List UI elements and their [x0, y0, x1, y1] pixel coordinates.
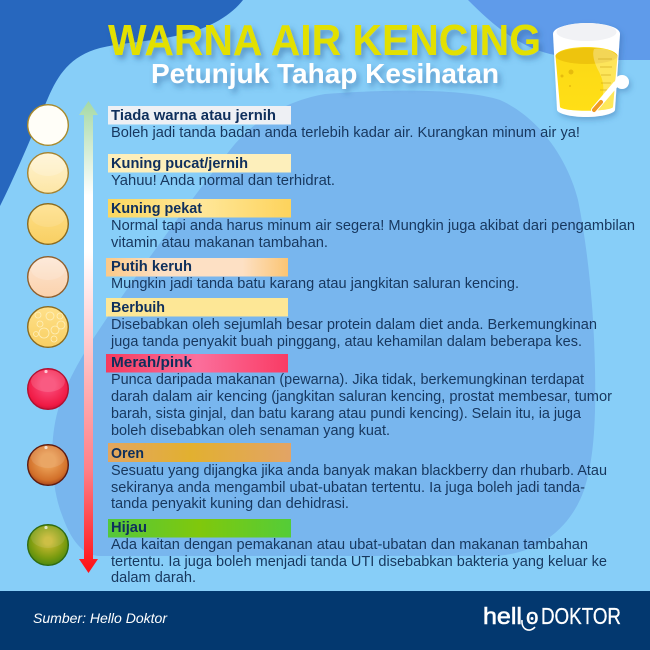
panel: green: Ada kaitan dengan pemakanan atau ubat-ubatan dan makanan tambahan — [111, 537, 588, 553]
panel: green — [108, 519, 607, 586]
title: WARNA AIR KENCING — [108, 16, 541, 65]
icon: foamy sample — [28, 307, 68, 347]
panel: dark yellow: Kuning pekat — [111, 200, 202, 217]
panel: green: tertentu. Ia juga boleh menjadi tanda UTI disebabkan bakteria yang keluar ke — [111, 554, 607, 570]
icon: orange sample — [28, 445, 68, 485]
panel: orange: tanda penyakit kuning dan dehidrasi. — [111, 496, 349, 512]
icon: pale yellow sample — [28, 153, 68, 193]
panel: foamy — [106, 298, 597, 350]
panel: orange: Oren — [111, 445, 144, 462]
panel: orange — [108, 443, 607, 512]
arrow: hydration scale — [79, 101, 98, 573]
panel: pale yellow: Yahuu! Anda normal dan terhidrat. — [111, 173, 335, 189]
panel: cloudy white: Putih keruh — [111, 258, 192, 275]
icon: urine cup with dipstick — [553, 23, 629, 117]
panel: cloudy white: Mungkin jadi tanda batu karang atau jangkitan saluran kencing. — [111, 276, 519, 292]
panel: orange: Sesuatu yang dijangka jika anda banyak makan blackberry dan rhubarb. Atau — [111, 463, 607, 479]
panel: clear: Tiada warna atau jernih — [111, 107, 276, 124]
icon: red sample — [28, 369, 68, 409]
panel: green: dalam darah. — [111, 570, 196, 586]
panel: red or pink: Merah/pink — [111, 354, 193, 371]
panel: red or pink: darah dalam air kencing (jangkitan saluran kencing, prostat membesar, tumor — [111, 389, 612, 405]
logo: hell — [483, 603, 522, 629]
title — [108, 16, 541, 89]
subtitle: Petunjuk Tahap Kesihatan — [151, 58, 499, 89]
panel: red or pink: Punca daripada makanan (pewarna). Jika tidak, berkemungkinan terdapat — [111, 372, 584, 388]
panel: dark yellow — [108, 199, 635, 251]
panel: orange: sekiranya anda mengambil ubat-ubatan tertentu. Ia juga boleh jadi tanda- — [111, 480, 585, 496]
icon: dark yellow sample — [28, 204, 68, 244]
panel: foamy: Berbuih — [111, 299, 165, 316]
panel: red or pink: barah, sista ginjal, dan batu karang atau pundi kencing). Selain itu, ia juga — [111, 406, 582, 422]
panel: red or pink: boleh disebabkan oleh senaman yang kuat. — [111, 423, 390, 439]
panel: clear — [108, 106, 580, 141]
icon: cloudy white sample — [28, 257, 68, 297]
icon: green sample — [28, 525, 68, 565]
panel: foamy: juga tanda penyakit buah pinggang, atau kehamilan dalam beberapa kes. — [110, 334, 582, 350]
logo: o — [526, 604, 538, 629]
panel: pale yellow — [108, 154, 335, 189]
panel: dark yellow: vitamin atau makanan tambahan. — [111, 235, 328, 251]
logo — [483, 603, 621, 630]
icon: clear sample — [28, 105, 68, 145]
panel: clear: Boleh jadi tanda badan anda terlebih kadar air. Kurangkan minum air ya! — [111, 125, 580, 141]
footer — [0, 591, 650, 650]
panel: green: Hijau — [111, 519, 147, 536]
panel: red or pink — [106, 354, 612, 439]
panel: cloudy white — [106, 258, 519, 292]
logo: DOKTOR — [541, 603, 621, 629]
panel: foamy: Disebabkan oleh sejumlah besar protein dalam diet anda. Berkemungkinan — [111, 317, 597, 333]
source text: Sumber: Hello Doktor — [33, 610, 168, 626]
panel: dark yellow: Normal tapi anda harus minum air segera! Mungkin juga akibat dari pengambilan — [111, 218, 635, 234]
panel: pale yellow: Kuning pucat/jernih — [111, 155, 248, 172]
